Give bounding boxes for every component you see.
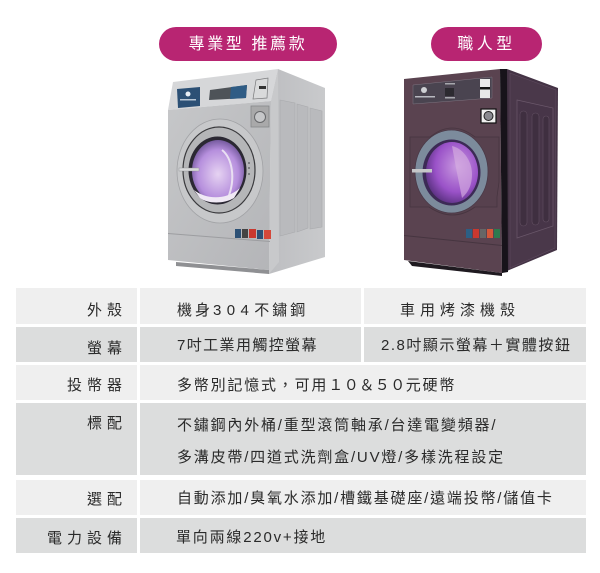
- row: 投幣器: 多幣別記憶式，可用１０＆５０元硬幣: [177, 377, 456, 394]
- logo plate: [177, 87, 200, 108]
- badge: 專業型 推薦款: 專業型 推薦款: [189, 36, 307, 53]
- screen: [209, 85, 247, 100]
- row: 選配: 自動添加/臭氧水添加/槽鐵基礎座/遠端投幣/儲值卡: [177, 490, 554, 507]
- row: 標配: 多溝皮帶/四道式洗劑盒/UV燈/多樣洗程設定: [177, 449, 505, 466]
- label stickers: [466, 229, 472, 238]
- row: 螢幕: 螢幕: [87, 340, 127, 357]
- badge: 職人型: 職人型: [457, 36, 516, 53]
- row: 投幣器: [16, 365, 586, 400]
- row: 選配: [16, 480, 586, 515]
- machine: painted washer: [404, 69, 558, 276]
- coin box: [251, 106, 269, 127]
- row: 選配: 選配: [87, 491, 127, 508]
- door: [415, 130, 488, 213]
- row: 外殼: [16, 288, 586, 324]
- label stickers: [235, 229, 241, 238]
- row: 螢幕: [16, 327, 586, 362]
- row: 投幣器: 投幣器: [67, 377, 127, 394]
- badge: 職人型: [431, 27, 542, 61]
- coin box: [481, 109, 496, 123]
- row: 外殼: 機身304不鏽鋼: [177, 302, 308, 319]
- row: 標配: 不鏽鋼內外桶/重型滾筒軸承/台達電變頻器/: [177, 417, 497, 434]
- row: 電力設備: 單向兩線220v+接地: [176, 529, 327, 546]
- row: 外殼: 車用烤漆機殼: [400, 302, 520, 319]
- row: 電力設備: 電力設備: [47, 530, 127, 547]
- row: 電力設備: [16, 518, 586, 553]
- row: 外殼: 外殼: [87, 302, 127, 319]
- coin slot: [253, 78, 268, 99]
- door: [177, 119, 263, 223]
- machine: stainless washer: [168, 69, 325, 274]
- control panel: [413, 77, 492, 104]
- spec table: [16, 288, 586, 553]
- row: 標配: 標配: [87, 415, 127, 432]
- door recess: [410, 128, 499, 215]
- row: 標配: [16, 403, 586, 475]
- row: 螢幕: 7吋工業用觸控螢幕: [177, 337, 318, 354]
- row: 螢幕: 2.8吋顯示螢幕＋實體按鈕: [381, 337, 571, 354]
- badge: 專業型 推薦款: [159, 27, 337, 61]
- illustration: washers: [168, 69, 558, 276]
